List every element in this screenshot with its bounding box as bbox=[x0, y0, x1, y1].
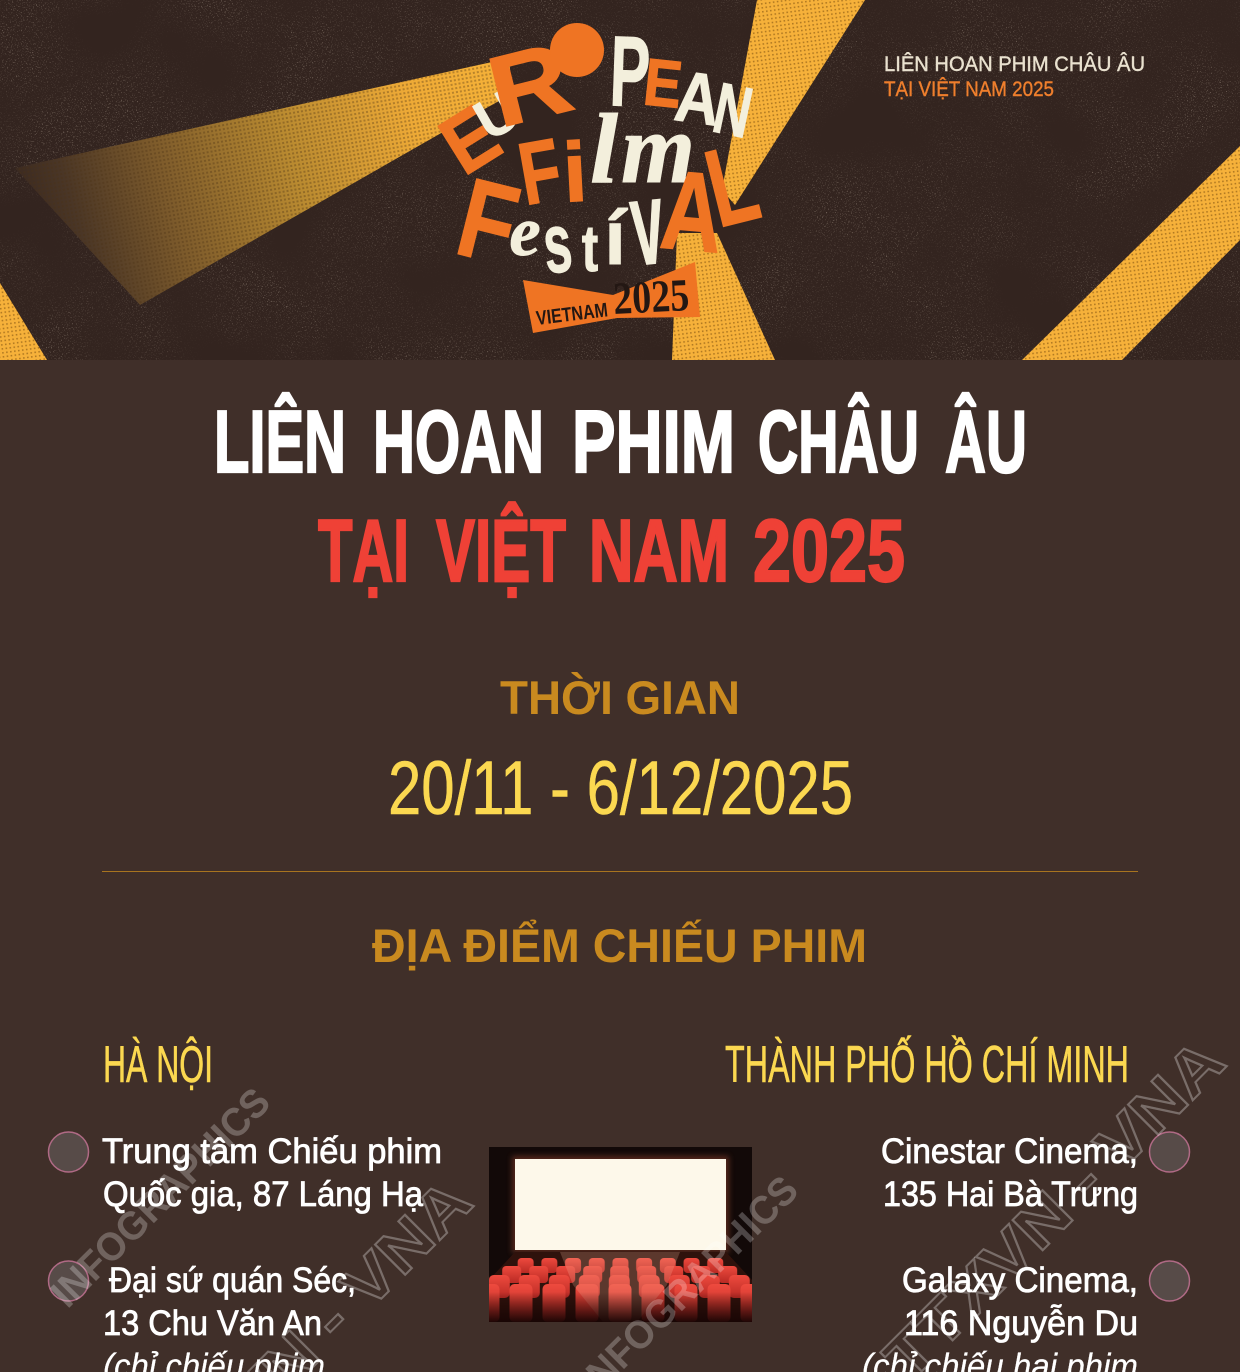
festival logo lettering: F bbox=[446, 155, 530, 289]
Hanoi venue 2: Đại sứ quán Séc, bbox=[109, 1261, 356, 1300]
HCMC venue 1: 135 Hai Bà Trưng bbox=[883, 1175, 1138, 1214]
title: TẠI bbox=[318, 501, 409, 600]
logo ribbon: Vietnam 2025 bbox=[523, 262, 700, 333]
Hanoi venue 1: Quốc gia, 87 Láng Hạ bbox=[103, 1175, 424, 1214]
spotlight beam: bottom left bbox=[0, 283, 47, 360]
HCMC venue 2: Galaxy Cinema, bbox=[902, 1261, 1138, 1300]
title: NAM bbox=[589, 501, 729, 600]
banner grain bbox=[0, 0, 1240, 360]
festival logo lettering: A bbox=[656, 146, 728, 276]
venues heading: ĐỊA ĐIỂM CHIẾU PHIM bbox=[372, 919, 867, 972]
HCMC venue 1 bbox=[881, 1132, 1138, 1214]
festival logo lettering: A bbox=[670, 57, 725, 142]
title: VIỆT bbox=[436, 501, 566, 600]
title: LIÊN bbox=[214, 392, 346, 491]
illustration: cinema screen and seats bbox=[489, 1147, 752, 1322]
logo ribbon: Vietnam 2025: VIETNAM bbox=[535, 299, 609, 330]
time heading: THỜI GIAN bbox=[500, 671, 740, 724]
spotlight beam: bottom right bbox=[1022, 146, 1240, 360]
HCMC venue 2: 116 Nguyễn Du bbox=[904, 1304, 1138, 1343]
Hanoi venue 1: Trung tâm Chiếu phim bbox=[102, 1132, 442, 1171]
HCMC venue 2 marker bbox=[1150, 1261, 1190, 1301]
banner caption: LIÊN HOAN PHIM CHÂU ÂU bbox=[884, 53, 1145, 76]
HCMC venue 2 bbox=[862, 1261, 1138, 1372]
logo ribbon: Vietnam 2025: 2025 bbox=[612, 269, 690, 324]
festival logo lettering: N bbox=[707, 68, 759, 154]
festival logo lettering: L bbox=[695, 121, 770, 251]
Hanoi venue 2 marker bbox=[48, 1261, 88, 1301]
festival logo lettering: F bbox=[512, 121, 568, 224]
festival logo lettering bbox=[424, 16, 770, 291]
HCMC venue 1 marker bbox=[1150, 1132, 1190, 1172]
title: PHIM bbox=[572, 392, 735, 491]
festival logo lettering: P bbox=[608, 16, 652, 128]
festival logo lettering: v bbox=[624, 154, 670, 291]
spotlight beam: bottom centre bbox=[672, 233, 775, 360]
festival logo lettering: s bbox=[538, 194, 576, 291]
festival logo lettering: E bbox=[424, 87, 515, 192]
watermarks bbox=[43, 1026, 1238, 1372]
festival logo lettering: i bbox=[561, 124, 589, 220]
festival logo lettering: l bbox=[590, 93, 618, 204]
Hanoi venue 2 bbox=[103, 1261, 356, 1372]
title: HOAN bbox=[373, 392, 544, 491]
header banner bbox=[0, 0, 1240, 360]
spotlight beam: left bbox=[15, 58, 510, 305]
title: 2025 bbox=[753, 501, 905, 600]
festival dates: 20/11 - 6/12/2025 bbox=[388, 746, 853, 831]
festival logo lettering: í bbox=[604, 196, 628, 281]
festival logo lettering: R bbox=[478, 22, 582, 149]
Hanoi venue 1 bbox=[102, 1132, 442, 1214]
festival logo lettering: U bbox=[463, 77, 530, 152]
festival logo lettering: E bbox=[641, 45, 685, 122]
festival logo lettering: m bbox=[621, 94, 695, 205]
title: ÂU bbox=[945, 392, 1027, 491]
festival logo lettering: t bbox=[582, 212, 598, 286]
Hanoi venue 1 marker bbox=[48, 1132, 88, 1172]
title bbox=[214, 392, 1027, 600]
banner caption bbox=[884, 53, 1145, 101]
watermarks: INFOGRAPHICS bbox=[43, 1080, 279, 1316]
festival logo lettering: e bbox=[509, 194, 541, 271]
banner caption: TẠI VIỆT NAM 2025 bbox=[884, 78, 1054, 101]
Hanoi column heading: HÀ NỘI bbox=[103, 1036, 213, 1094]
title: CHÂU bbox=[758, 392, 919, 491]
HCMC venue 1: Cinestar Cinema, bbox=[881, 1132, 1138, 1171]
spotlight beam: top right bbox=[722, 0, 865, 205]
Hanoi venue 2: 13 Chu Văn An bbox=[103, 1304, 322, 1343]
